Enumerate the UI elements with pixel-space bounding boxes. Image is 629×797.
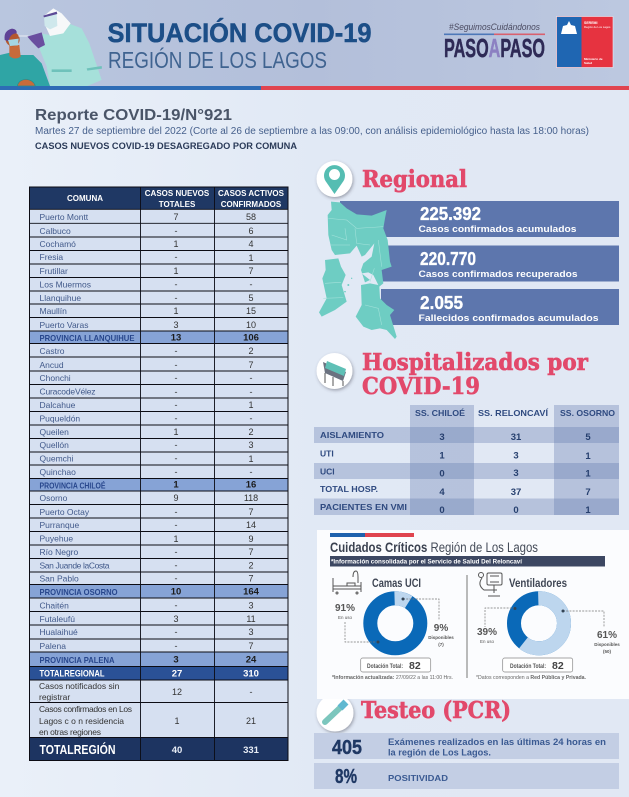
labels: 91% in use: En uso bbox=[338, 615, 352, 620]
box: total ICU beds: 82 bbox=[409, 660, 421, 672]
logo: Paso a Paso: #SeguimosCuidándonos bbox=[449, 22, 540, 33]
Osorno rows: Río Negro bbox=[40, 547, 79, 557]
province bands bbox=[30, 331, 288, 760]
accent bar bbox=[330, 533, 414, 537]
icon: map pin bbox=[316, 161, 352, 197]
stat: tests: 405 bbox=[332, 737, 362, 759]
Chiloé rows: Chonchi bbox=[40, 373, 71, 383]
Palena rows: - bbox=[174, 641, 178, 651]
Chiloé rows: 2 bbox=[248, 346, 254, 356]
stat: positivity: 8% bbox=[335, 766, 357, 788]
Osorno rows: San Juande laCosta bbox=[40, 560, 110, 570]
Palena rows: Palena bbox=[40, 641, 66, 651]
header banner bbox=[0, 0, 629, 90]
title: SITUACIÓN COVID-19 bbox=[108, 18, 372, 48]
labels: 9% available: (7) bbox=[438, 642, 444, 647]
subtitle: REGIÓN DE LOS LAGOS bbox=[108, 47, 327, 73]
Llanquihue rows: Cochamó bbox=[40, 239, 76, 249]
values: 0 bbox=[513, 505, 519, 516]
Palena rows: 3 bbox=[248, 600, 254, 610]
Chiloé rows: - bbox=[174, 414, 178, 424]
Llanquihue rows: Llanquihue bbox=[40, 293, 81, 303]
Llanquihue rows: 7 bbox=[248, 266, 254, 276]
Osorno rows: - bbox=[174, 507, 178, 517]
notified without registration row bbox=[39, 681, 252, 702]
stat: recovered: Casos confirmados recuperados bbox=[418, 269, 578, 280]
values: 31 bbox=[511, 432, 522, 443]
stat: recovered: 220.770 bbox=[420, 249, 476, 269]
logo: Ministerio de Salud: Ministerio de bbox=[584, 57, 603, 61]
logo: Ministerio de Salud: Salud bbox=[584, 61, 592, 65]
Llanquihue rows: 106 bbox=[243, 332, 259, 344]
header row: CASOS ACTIVOS bbox=[218, 189, 285, 198]
Llanquihue rows: Los Muermos bbox=[40, 280, 91, 290]
notified without registration row: - bbox=[250, 687, 252, 697]
total regional row: 310 bbox=[243, 668, 259, 680]
Llanquihue rows: 15 bbox=[246, 306, 256, 316]
Osorno rows: 10 bbox=[171, 586, 181, 598]
panel: regional bbox=[316, 161, 619, 339]
icon: ventilator bbox=[478, 572, 502, 596]
stat: recovered bbox=[418, 249, 578, 280]
grid lines bbox=[30, 187, 288, 760]
Chiloé rows: - bbox=[174, 440, 178, 450]
Llanquihue rows: Calbuco bbox=[40, 226, 71, 236]
labels: 9% available: Disponibles bbox=[428, 635, 454, 640]
Chiloé rows: 3 bbox=[248, 440, 254, 450]
Chiloé rows: - bbox=[174, 387, 178, 397]
values: 3 bbox=[513, 468, 519, 479]
labels: 39% in use: 39% bbox=[477, 627, 497, 638]
panel: critical care bbox=[317, 530, 629, 699]
Palena rows: 7 bbox=[248, 641, 254, 651]
Chiloé rows: - bbox=[174, 373, 178, 383]
Chiloé rows: - bbox=[250, 373, 252, 383]
labels: 61% available: (50) bbox=[603, 649, 611, 654]
Osorno rows: - bbox=[174, 520, 178, 530]
Chiloé rows bbox=[40, 346, 256, 490]
total region row: 40 bbox=[172, 745, 182, 756]
note: data source: *Datos corresponden a Red Pública y Privada. bbox=[476, 675, 587, 681]
Llanquihue rows: PROVINCIA LLANQUIHUE bbox=[40, 333, 135, 343]
info bar bbox=[330, 556, 605, 566]
Palena rows: 3 bbox=[248, 627, 254, 637]
table subtitle: CASOS NUEVOS COVID-19 DESAGREGADO POR COMUNA bbox=[35, 141, 297, 151]
stat: tests bbox=[314, 733, 619, 759]
Osorno rows: 9 bbox=[173, 493, 179, 503]
box: total ventilators bbox=[503, 658, 573, 672]
Llanquihue rows: 1 bbox=[248, 253, 254, 263]
table: cases by comuna bbox=[30, 187, 288, 760]
note: update date: *Información actualizada: 27/09/22 a las 11:00 Hrs. bbox=[332, 675, 453, 681]
logo: Paso a Paso bbox=[444, 22, 545, 63]
labels: 61% available bbox=[594, 630, 620, 654]
Osorno rows: 164 bbox=[243, 586, 260, 598]
Llanquihue rows: Frutillar bbox=[40, 266, 68, 276]
Palena rows: Futaleufú bbox=[40, 614, 75, 624]
Osorno rows: 14 bbox=[246, 520, 256, 530]
column headers bbox=[415, 408, 615, 418]
Llanquihue rows: 1 bbox=[173, 306, 179, 316]
Chiloé rows: CuracodeVélez bbox=[40, 386, 96, 396]
values: 1 bbox=[439, 450, 445, 462]
Chiloé rows: 7 bbox=[248, 360, 254, 370]
labels: 61% available: Disponibles bbox=[594, 642, 620, 647]
values: 0 bbox=[439, 468, 445, 480]
stat: deaths: 2.055 bbox=[420, 293, 463, 313]
Chiloé rows: Quinchao bbox=[40, 467, 76, 477]
confirmed with other-region residence row: 1 bbox=[174, 716, 180, 726]
Palena rows: Hualaihué bbox=[40, 627, 78, 637]
Chiloé rows: 1 bbox=[248, 454, 254, 464]
table: hospitalized by service bbox=[314, 405, 619, 516]
Llanquihue rows: - bbox=[174, 226, 178, 236]
stat: confirmed: Casos confirmados acumulados bbox=[418, 224, 576, 235]
report date: Martes 27 de septiembre del 2022 (Corte al 26 de septiembre a las 09:00, con análisis epidemiológico hasta las 18:00 horas) bbox=[35, 126, 589, 137]
heading: Hospitalizados por COVID-19 bbox=[362, 349, 589, 400]
row labels: UTI bbox=[320, 448, 334, 458]
column headers: SS. RELONCAVÍ bbox=[478, 408, 549, 418]
Chiloé rows: Quellón bbox=[40, 440, 69, 450]
Osorno rows: 7 bbox=[248, 547, 254, 557]
box: total ventilators: 82 bbox=[552, 660, 564, 672]
box: total ventilators: Dotación Total: bbox=[510, 664, 546, 670]
Chiloé rows: PROVINCIA CHILOÉ bbox=[40, 480, 106, 490]
Chiloé rows: - bbox=[250, 414, 252, 424]
Osorno rows: PROVINCIA OSORNO bbox=[40, 587, 118, 597]
Chiloé rows: Dalcahue bbox=[40, 400, 76, 410]
panel: hospitalized bbox=[314, 349, 619, 516]
logo: Paso a Paso: PASOAPASO bbox=[444, 33, 545, 63]
values: 1 bbox=[585, 505, 591, 516]
Osorno rows: 7 bbox=[248, 574, 254, 584]
row labels: TOTAL HOSP. bbox=[320, 484, 378, 494]
Chiloé rows: - bbox=[174, 360, 178, 370]
Llanquihue rows bbox=[40, 212, 259, 344]
Palena rows: 3 bbox=[173, 614, 179, 624]
Osorno rows: Purranque bbox=[40, 520, 79, 530]
labels: 39% in use bbox=[477, 627, 497, 644]
Chiloé rows: Ancud bbox=[40, 360, 64, 370]
values: 37 bbox=[511, 487, 521, 498]
header row bbox=[30, 187, 288, 209]
report heading: Reporte COVID-19/N°921 bbox=[35, 107, 232, 124]
values: 1 bbox=[585, 451, 591, 462]
values: 1 bbox=[585, 468, 591, 480]
Chiloé rows: 16 bbox=[246, 480, 256, 490]
illustration: health workers bbox=[0, 8, 102, 86]
label: Camas UCI: Camas UCI bbox=[372, 578, 421, 590]
Llanquihue rows: - bbox=[174, 280, 178, 290]
stat: confirmed: 225.392 bbox=[420, 204, 481, 224]
Osorno rows: 7 bbox=[248, 507, 254, 517]
Chiloé rows: - bbox=[250, 387, 252, 397]
Palena rows: 24 bbox=[246, 654, 257, 666]
box: total ICU beds bbox=[361, 658, 431, 672]
icon: hospital bed bbox=[316, 353, 352, 389]
Llanquihue rows: 7 bbox=[173, 212, 179, 222]
labels: 39% in use: En uso bbox=[480, 639, 494, 644]
values: 4 bbox=[439, 487, 445, 498]
Osorno rows: Puerto Octay bbox=[40, 507, 90, 517]
Llanquihue rows: 5 bbox=[248, 293, 254, 303]
column headers: SS. OSORNO bbox=[560, 408, 615, 418]
Llanquihue rows: - bbox=[250, 280, 252, 290]
Chiloé rows: Puqueldón bbox=[40, 414, 80, 424]
Osorno rows bbox=[40, 493, 260, 598]
Llanquihue rows: Fresia bbox=[40, 252, 63, 262]
donut: Camas UCI bbox=[345, 598, 439, 648]
notified without registration row: registrar bbox=[39, 692, 70, 702]
values: 7 bbox=[585, 487, 591, 498]
stat: positivity bbox=[314, 763, 619, 789]
values: 0 bbox=[439, 505, 445, 516]
Osorno rows: 9 bbox=[248, 534, 254, 544]
Llanquihue rows: 3 bbox=[173, 320, 179, 330]
heading: Regional: Regional bbox=[362, 166, 467, 193]
column headers: SS. CHILOÉ bbox=[415, 408, 465, 418]
total regional row: TOTALREGIONAL bbox=[40, 668, 105, 678]
Llanquihue rows: 4 bbox=[248, 239, 254, 249]
logo: Ministerio de Salud: Región de Los Lagos bbox=[584, 25, 611, 29]
heading: Hospitalizados por COVID-19: COVID-19 bbox=[362, 373, 480, 400]
row labels bbox=[320, 430, 407, 512]
stat: positivity: POSITIVIDAD bbox=[388, 773, 448, 783]
total region row: 331 bbox=[243, 745, 260, 756]
label: Ventiladores: Ventiladores bbox=[509, 578, 567, 590]
Chiloé rows: 1 bbox=[173, 427, 179, 437]
confirmed with other-region residence row: Casos confirmados en Los bbox=[39, 704, 132, 714]
donut: ventilators bbox=[485, 598, 604, 648]
Llanquihue rows: 10 bbox=[246, 320, 256, 330]
Llanquihue rows: 58 bbox=[246, 212, 256, 222]
Chiloé rows: - bbox=[174, 454, 178, 464]
stat: tests: Exámenes realizados en las últimas 24 horas en bbox=[388, 737, 606, 747]
Osorno rows: - bbox=[174, 574, 178, 584]
values bbox=[439, 432, 591, 516]
heading: Testeo (PCR): Testeo (PCR) bbox=[361, 697, 511, 724]
icon: ICU bed bbox=[333, 571, 361, 594]
Palena rows bbox=[40, 600, 257, 666]
Osorno rows: 1 bbox=[173, 534, 179, 544]
divider bbox=[466, 575, 468, 678]
Osorno rows: San Pablo bbox=[40, 574, 79, 584]
Palena rows: 11 bbox=[246, 614, 256, 624]
stat: deaths bbox=[418, 293, 598, 324]
total regional row bbox=[40, 668, 259, 680]
Palena rows: - bbox=[174, 600, 178, 610]
stat: confirmed bbox=[418, 204, 576, 235]
header row: TOTALES bbox=[159, 200, 196, 209]
labels: 9% available bbox=[428, 623, 454, 647]
Osorno rows: 118 bbox=[244, 493, 258, 503]
confirmed with other-region residence row: en otras regiones bbox=[39, 727, 101, 737]
Chiloé rows: - bbox=[174, 467, 178, 477]
notified without registration row: Casos notificados sin bbox=[39, 681, 120, 691]
Chiloé rows: 2 bbox=[248, 427, 254, 437]
panel: testeo icon bbox=[316, 694, 354, 732]
total region row: TOTALREGIÓN bbox=[40, 742, 116, 757]
confirmed with other-region residence row: 21 bbox=[246, 716, 256, 726]
Palena rows: 3 bbox=[173, 654, 179, 666]
Chiloé rows: Queilen bbox=[40, 427, 69, 437]
Llanquihue rows: 6 bbox=[248, 226, 254, 236]
Llanquihue rows: 1 bbox=[173, 266, 179, 276]
Palena rows: PROVINCIA PALENA bbox=[40, 655, 114, 665]
Osorno rows: Osorno bbox=[40, 493, 68, 503]
header row: COMUNA bbox=[67, 194, 103, 203]
Llanquihue rows: 1 bbox=[173, 239, 179, 249]
Llanquihue rows: Puerto Montt bbox=[40, 212, 89, 222]
Llanquihue rows: Puerto Varas bbox=[40, 320, 88, 330]
Chiloé rows: Castro bbox=[40, 346, 65, 356]
Osorno rows: Puyehue bbox=[40, 534, 73, 544]
box: total ICU beds: Dotación Total: bbox=[367, 664, 403, 670]
Osorno rows: - bbox=[174, 560, 178, 570]
values: 5 bbox=[585, 432, 591, 443]
confirmed with other-region residence row: Lagos c o n residencia bbox=[39, 716, 124, 726]
heading: Cuidados Críticos: Cuidados Críticos Región de Los Lagos bbox=[330, 540, 538, 555]
panel: testing bbox=[314, 697, 619, 789]
values: 3 bbox=[439, 432, 445, 443]
Palena rows: - bbox=[174, 627, 178, 637]
total region row bbox=[40, 742, 260, 757]
total regional row: 27 bbox=[172, 668, 182, 680]
labels: 61% available: 61% bbox=[597, 630, 617, 641]
labels: 91% in use bbox=[335, 603, 355, 620]
notified without registration row: 12 bbox=[172, 687, 182, 697]
Chiloé rows: - bbox=[174, 346, 178, 356]
Osorno rows: - bbox=[174, 547, 178, 557]
heading: Hospitalizados por COVID-19: Hospitalizados por bbox=[362, 349, 589, 376]
labels: 91% in use: 91% bbox=[335, 603, 355, 614]
Chiloé rows: 1 bbox=[248, 400, 254, 410]
stat banners bbox=[340, 201, 619, 325]
values: 3 bbox=[513, 450, 519, 462]
stat: tests: la región de Los Lagos. bbox=[388, 748, 491, 758]
Palena rows: Chaitén bbox=[40, 600, 69, 610]
map of Los Lagos bbox=[319, 202, 397, 339]
Osorno rows: 2 bbox=[248, 560, 254, 570]
labels: 9% available: 9% bbox=[434, 623, 448, 634]
Llanquihue rows: Maullín bbox=[40, 306, 67, 316]
Llanquihue rows: - bbox=[174, 293, 178, 303]
stat: deaths: Fallecidos confirmados acumulados bbox=[418, 313, 598, 324]
header row: CONFIRMADOS bbox=[221, 200, 282, 209]
info bar: *Información consolidada por el Servicio de Salud Del Reloncaví bbox=[331, 558, 522, 566]
Chiloé rows: Quemchi bbox=[40, 454, 74, 464]
row labels: UCI bbox=[320, 466, 335, 476]
header row: CASOS NUEVOS bbox=[145, 189, 210, 198]
confirmed with other-region residence row bbox=[39, 704, 256, 737]
logo: Ministerio de Salud bbox=[556, 16, 613, 68]
Chiloé rows: - bbox=[174, 400, 178, 410]
Chiloé rows: 1 bbox=[173, 480, 179, 490]
logo: Ministerio de Salud: SEREMI bbox=[584, 21, 597, 25]
Llanquihue rows: - bbox=[174, 252, 178, 262]
row labels: AISLAMIENTO bbox=[320, 430, 384, 440]
Llanquihue rows: 13 bbox=[171, 332, 181, 344]
Chiloé rows: - bbox=[250, 467, 252, 477]
row labels: PACIENTES EN VMI bbox=[320, 502, 407, 512]
